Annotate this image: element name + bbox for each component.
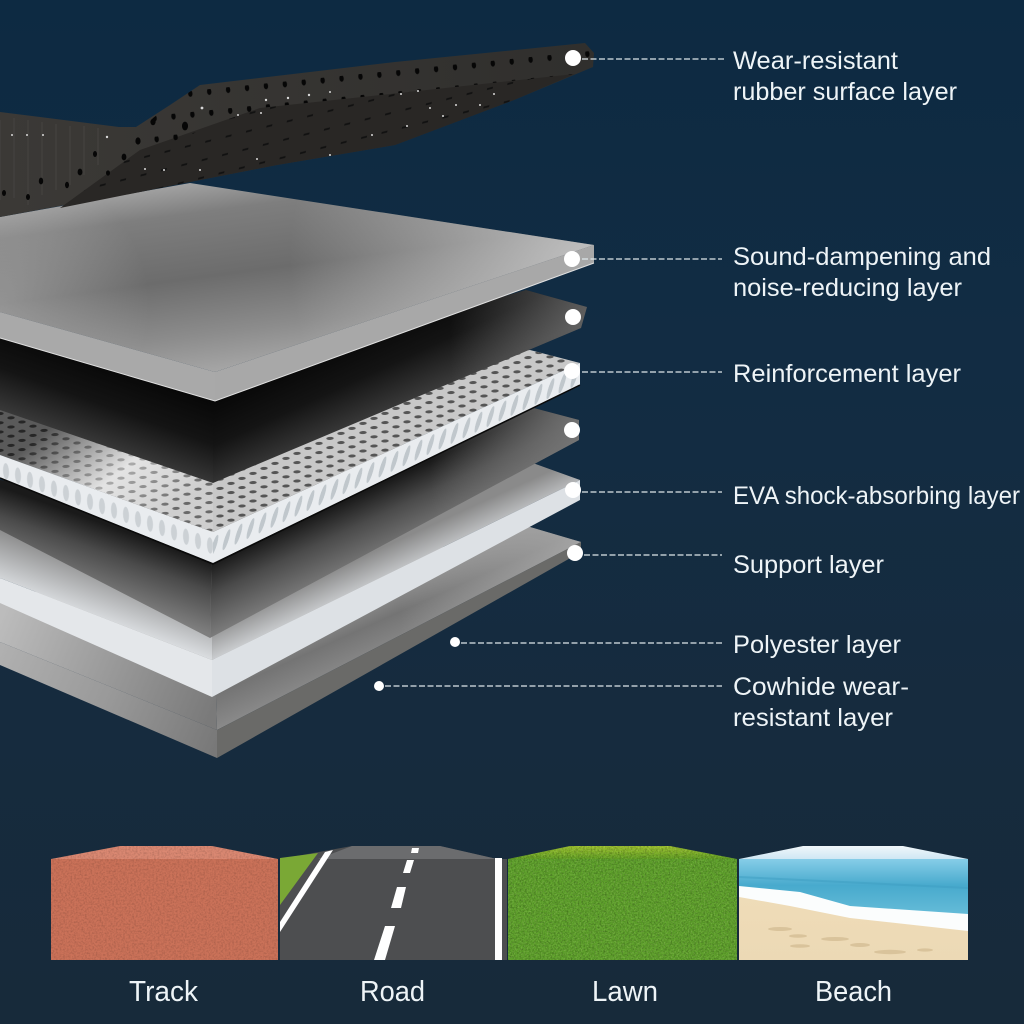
callout: reinforcement layer: Reinforcement layer	[733, 360, 961, 388]
layer: perforated rubber surface sheet	[0, 43, 594, 217]
marker: black foam sheet	[565, 309, 581, 325]
panel: beach surface	[739, 846, 968, 1008]
callout: support layer: Support layer	[733, 551, 884, 579]
label: Road: Road	[360, 976, 425, 1008]
footprints	[768, 927, 933, 954]
label: Lawn: Lawn	[592, 976, 658, 1008]
layer: sound-dampening sheet	[0, 183, 594, 401]
callout: polyester layer	[450, 631, 901, 659]
callout: cowhide wear-resistant layer: resistant layer	[733, 704, 893, 732]
lane dashes	[374, 848, 419, 960]
panel: track surface	[51, 846, 278, 1008]
label: Beach: Beach	[815, 976, 892, 1008]
label: Track: Track	[129, 976, 198, 1008]
layer: reinforcement mesh	[0, 350, 580, 564]
callout: EVA shock-absorbing layer	[565, 482, 1020, 510]
callout: wear-resistant rubber surface layer: rubber surface layer	[733, 78, 957, 106]
callout: sound-dampening and noise-reducing layer: noise-reducing layer	[733, 274, 962, 302]
layered sole exploded diagram	[0, 43, 594, 758]
surface perforation dots, left	[2, 119, 188, 200]
callout: polyester layer: Polyester layer	[733, 631, 901, 659]
surface highlights	[11, 90, 495, 171]
callout: support layer	[567, 545, 884, 579]
callout: wear-resistant rubber surface layer: Wear-resistant	[733, 47, 898, 75]
panel: lawn surface	[508, 846, 737, 1008]
callout: cowhide wear-resistant layer: Cowhide wear-	[733, 673, 909, 701]
layer: EVA shock-absorbing	[0, 462, 580, 697]
panel: road surface	[280, 846, 507, 1008]
callout: sound-dampening and noise-reducing layer	[564, 243, 991, 302]
callout: wear-resistant rubber surface layer	[565, 47, 957, 106]
callout: reinforcement layer	[564, 360, 961, 388]
layer: dark gray support sheet	[0, 407, 579, 638]
marker: dark gray sheet	[564, 422, 580, 438]
callout: EVA shock-absorbing layer: EVA shock-absorbing layer	[733, 482, 1020, 510]
callout: cowhide wear-resistant layer	[374, 673, 909, 732]
layer: black foam sheet	[0, 290, 587, 483]
layer: cowhide wear-resistant base with polyester layer	[0, 527, 581, 758]
callout: sound-dampening and noise-reducing layer: Sound-dampening and	[733, 243, 991, 271]
